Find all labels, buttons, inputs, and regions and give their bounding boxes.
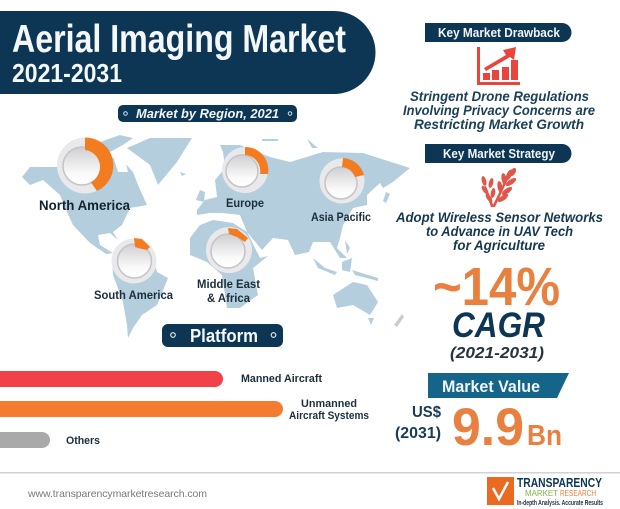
stat: market value: 9.9 xyxy=(452,398,524,457)
title banner xyxy=(0,11,375,94)
text: strategy description: Adopt Wireless Sensor Networks xyxy=(395,209,603,225)
logo: transparency market research xyxy=(487,475,603,507)
donut: middle east and africa xyxy=(206,227,252,273)
bar: unmanned aircraft systems xyxy=(0,398,369,422)
stat: cagr percentage: ~14% xyxy=(433,257,560,317)
text: drawback description: Involving Privacy Concerns are xyxy=(403,102,595,118)
label: north america: North America xyxy=(39,197,130,213)
donut: europe xyxy=(222,147,268,193)
bar: unmanned aircraft systems: Unmanned xyxy=(301,398,357,410)
stat: market value: Bn xyxy=(527,420,562,452)
heading: key market strategy: Key Market Strategy xyxy=(443,146,556,161)
donut: north america xyxy=(57,137,113,194)
footer: website: www.transparencymarketresearch.com xyxy=(27,488,207,500)
stat: market value xyxy=(395,398,562,457)
donut: asia pacific xyxy=(320,158,364,204)
title banner: Aerial Imaging Market xyxy=(12,18,346,61)
text: strategy description: to Advance in UAV Tech xyxy=(426,223,573,239)
title banner: 2021-2031 xyxy=(12,58,122,88)
heading: key market strategy xyxy=(425,144,571,163)
bar: manned aircraft xyxy=(0,371,322,387)
heading: market value xyxy=(428,373,569,398)
stat: market value: US$ xyxy=(412,404,441,421)
heading: market by region: Market by Region, 2021 xyxy=(136,106,279,121)
text: strategy description xyxy=(395,209,603,253)
stat: cagr period: (2021-2031) xyxy=(450,345,544,362)
bar: others xyxy=(0,432,100,448)
logo: transparency market research: MARKET xyxy=(525,489,558,498)
label: middle east and africa: & Africa xyxy=(207,291,250,305)
text: drawback description xyxy=(403,88,595,132)
world map xyxy=(22,135,410,338)
bar: manned aircraft: Manned Aircraft xyxy=(241,373,322,385)
label: south america: South America xyxy=(94,288,173,302)
icon: rising bar chart xyxy=(477,47,520,85)
text: drawback description: Stringent Drone Regulations xyxy=(410,88,589,104)
label: middle east and africa xyxy=(197,277,260,305)
heading: platform: Platform xyxy=(190,326,258,346)
icon: wheat xyxy=(480,167,517,207)
donut: south america xyxy=(112,238,156,284)
label: middle east and africa: Middle East xyxy=(197,277,260,291)
heading: platform xyxy=(162,324,283,347)
logo: transparency market research: RESEARCH xyxy=(560,489,596,498)
bar: others: Others xyxy=(66,435,100,447)
label: asia pacific: Asia Pacific xyxy=(311,210,371,224)
heading: key market drawback: Key Market Drawback xyxy=(438,25,561,40)
heading: market value: Market Value xyxy=(442,377,540,396)
stat: cagr label: CAGR xyxy=(452,306,546,345)
text: strategy description: for Agriculture xyxy=(453,237,545,253)
text: drawback description: Restricting Market Growth xyxy=(414,116,584,132)
stat: market value: (2031) xyxy=(395,425,441,442)
label: europe: Europe xyxy=(226,196,264,210)
bar: unmanned aircraft systems: Aircraft Systems xyxy=(289,410,369,422)
